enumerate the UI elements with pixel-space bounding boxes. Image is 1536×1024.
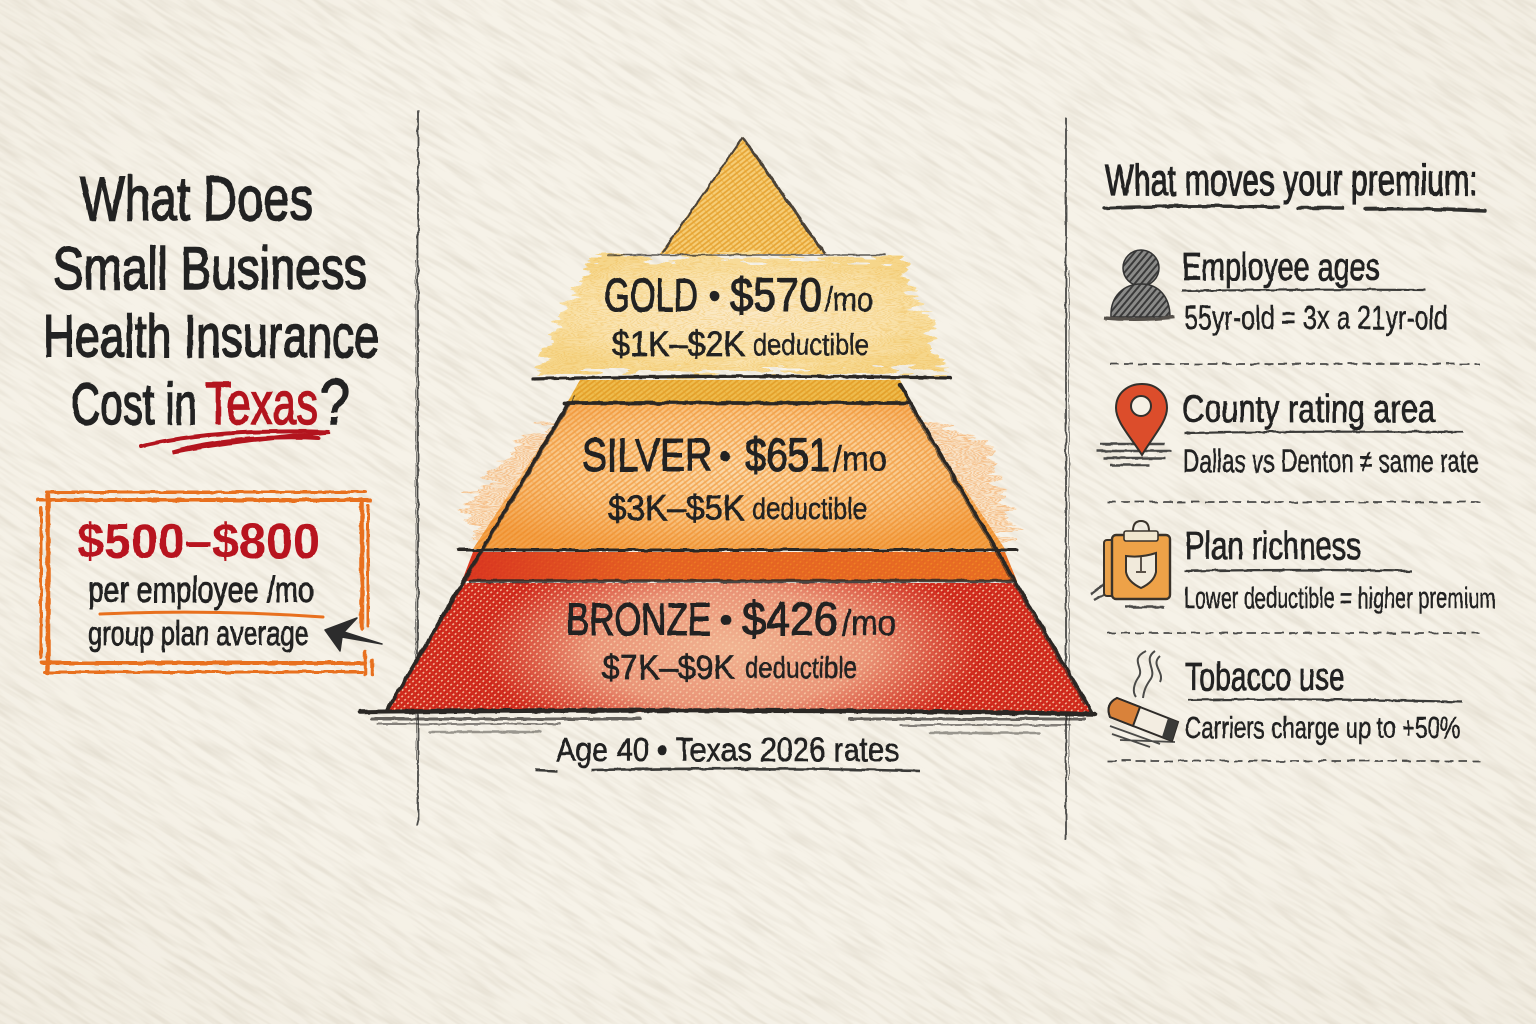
title: Cost in xyxy=(71,372,197,437)
bronze label: $426 xyxy=(742,592,838,645)
icon: map pin xyxy=(1096,384,1172,465)
icon: person xyxy=(1104,250,1174,319)
factor heading: Employee ages xyxy=(1182,246,1380,289)
callout: average cost box xyxy=(38,492,382,675)
right vertical divider xyxy=(1066,118,1069,840)
icon: clipboard with shield xyxy=(1091,521,1170,607)
title xyxy=(43,165,379,452)
silver label: deductible xyxy=(752,491,867,526)
bronze tier xyxy=(386,583,1092,712)
silver label: $651 xyxy=(745,428,830,481)
orange stripe xyxy=(462,552,1017,581)
bronze label: • xyxy=(720,599,733,640)
gold label xyxy=(604,268,873,364)
gold label: • xyxy=(708,275,721,316)
bronze label xyxy=(566,592,896,687)
title: Small Business xyxy=(53,235,367,302)
silver label xyxy=(582,428,887,528)
factor: county rating area xyxy=(1096,384,1479,479)
gold label: $1K–$2K xyxy=(612,325,745,364)
gold label: /mo xyxy=(825,281,873,319)
bronze label: /mo xyxy=(842,602,896,643)
factor heading: County rating area xyxy=(1182,388,1435,431)
arrow xyxy=(325,618,382,651)
callout label: group plan average: group plan average xyxy=(88,615,309,653)
footnote: age and rates: Age 40 • Texas 2026 rates xyxy=(556,731,899,768)
pyramid outlines xyxy=(360,255,1095,733)
gold label: $570 xyxy=(730,268,822,321)
callout label: per employee: per employee /mo xyxy=(88,569,314,610)
icon: cigarette with smoke xyxy=(1109,651,1178,747)
gold tier: lower stripe xyxy=(567,380,912,403)
bronze label: BRONZE xyxy=(566,594,711,645)
pyramid xyxy=(360,137,1095,733)
gold tier: label band xyxy=(533,258,945,372)
factor heading: Plan richness xyxy=(1185,525,1361,568)
silver label: /mo xyxy=(833,438,887,479)
gold label: GOLD xyxy=(604,269,698,321)
callout frame xyxy=(38,492,372,675)
bronze label: $7K–$9K xyxy=(602,649,735,687)
title: ? xyxy=(320,366,350,438)
silver outer smudge xyxy=(462,420,1012,545)
factor: employee ages xyxy=(1104,246,1448,336)
factor: plan richness xyxy=(1091,521,1496,615)
callout underline xyxy=(100,612,323,617)
silver label: • xyxy=(719,435,732,476)
callout amount: $500–$800 xyxy=(77,515,320,569)
factor detail: 55yr-old = 3x a 21yr-old xyxy=(1184,299,1448,336)
left vertical divider xyxy=(416,110,418,825)
title: Texas xyxy=(205,370,318,437)
title: Health Insurance xyxy=(43,303,379,370)
gold label: deductible xyxy=(753,327,869,362)
factor: tobacco use xyxy=(1109,651,1462,747)
silver label: $3K–$5K xyxy=(608,489,745,528)
bronze label: deductible xyxy=(745,650,857,685)
factor heading: Tobacco use xyxy=(1185,656,1345,699)
gold tier: apex xyxy=(660,137,825,254)
silver label: SILVER xyxy=(582,429,712,481)
panel: what moves your premium xyxy=(1091,156,1496,761)
silver tier xyxy=(473,404,1005,549)
title: What Does xyxy=(80,165,313,234)
